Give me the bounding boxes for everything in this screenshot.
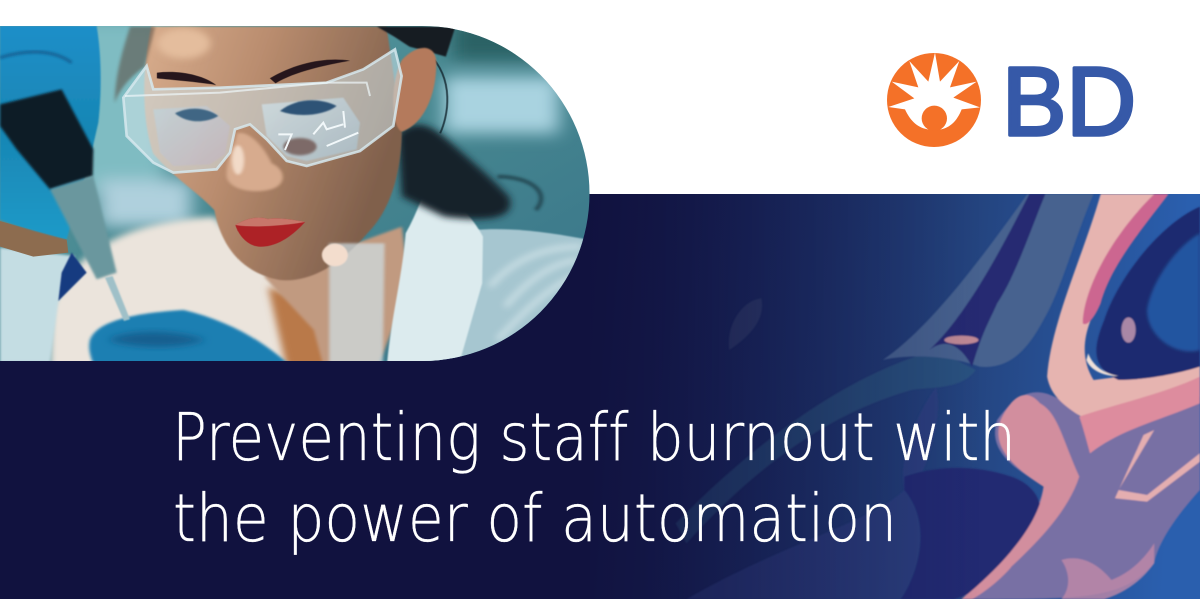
- right coat: [425, 228, 584, 361]
- forehead highlight: [157, 28, 210, 59]
- faint wisp: [729, 298, 762, 350]
- lab coat left: [50, 217, 299, 373]
- rose horizontal stroke: [1079, 377, 1200, 453]
- title line 1: Preventing staff burnout with: [172, 399, 1016, 476]
- upper lip: [235, 218, 305, 226]
- pipette tip: [105, 276, 130, 321]
- blurred lab backdrop: [73, 20, 566, 227]
- sleeve navy edge: [58, 253, 87, 301]
- goggle top bar highlight: [125, 83, 370, 96]
- pink salmon lobe: [961, 395, 1079, 599]
- left eyebrow: [157, 72, 216, 85]
- nose highlight: [232, 145, 244, 175]
- lens reflection smudge: [283, 138, 317, 155]
- light window patches: [444, 77, 559, 133]
- logo: BD: [887, 47, 1136, 156]
- artwork gradient base: [661, 194, 1200, 599]
- blue oval centre: [1147, 233, 1200, 351]
- light orb: [322, 244, 348, 266]
- lips: [235, 218, 305, 247]
- sleeve: [0, 248, 75, 363]
- coat fold highlights: [490, 247, 582, 340]
- test tube: [329, 243, 385, 370]
- inner shirt: [264, 284, 324, 361]
- pink dab: [944, 336, 979, 344]
- glove shadow: [107, 332, 207, 347]
- artwork left fade: [631, 194, 956, 599]
- dark swirl under word: [901, 468, 1041, 599]
- dark blue oval: [1096, 207, 1200, 380]
- lower pink ripple: [1061, 543, 1154, 599]
- left eye: [175, 109, 218, 121]
- glove knuckle shadow: [0, 52, 72, 63]
- logo symbol: [887, 53, 981, 147]
- hair strand loop: [498, 177, 541, 210]
- ear: [393, 48, 436, 132]
- goggle body: [123, 49, 402, 173]
- top hair: [377, 27, 455, 57]
- grey blue ribbon: [883, 194, 1094, 367]
- nose: [227, 133, 283, 191]
- goggle rim: [123, 49, 402, 173]
- goggles: [123, 49, 402, 173]
- right lens: [262, 98, 360, 161]
- wrist: [0, 221, 68, 257]
- white starburst: [888, 53, 980, 129]
- dark top right: [446, 28, 530, 66]
- hair mass: [398, 125, 510, 219]
- upper glove: [0, 26, 101, 239]
- pale left backdrop: [73, 20, 165, 193]
- cream vertical band: [1047, 194, 1200, 453]
- cream crescent: [1086, 353, 1119, 376]
- title: [172, 399, 1016, 557]
- abstract paint artwork: [590, 194, 1200, 599]
- artwork paint strokes: [676, 194, 1200, 599]
- photo: scientist with pipette: [0, 20, 600, 373]
- logo wordmark: BD: [1002, 47, 1136, 156]
- coat collar: [386, 200, 484, 361]
- mauve central mass: [961, 392, 1200, 599]
- neck: [264, 227, 409, 373]
- title line 2: the power of automation: [173, 480, 897, 557]
- pink inner stroke: [1083, 194, 1169, 324]
- photo background: [0, 26, 600, 362]
- face: [144, 27, 402, 280]
- lower indigo sweep: [686, 387, 938, 599]
- gloved hand and pipette: [0, 26, 130, 363]
- pipette body: [0, 89, 93, 189]
- left lens: [153, 106, 230, 166]
- orange disc: [887, 53, 981, 147]
- hair strand: [435, 60, 448, 134]
- light left patch: [100, 180, 191, 227]
- left temple hair: [115, 27, 155, 103]
- lower glove: [89, 310, 295, 370]
- figure head: [922, 106, 947, 131]
- right eye: [280, 100, 337, 115]
- teal sweep: [676, 350, 976, 543]
- small pink spot: [1121, 317, 1136, 343]
- zig-zag pink line: [1115, 430, 1200, 502]
- goggle reflection writing: [278, 111, 358, 150]
- pipette barrel: [50, 176, 117, 279]
- navy band background: [0, 194, 1200, 599]
- dark indigo ribbon core: [929, 194, 1045, 367]
- right eyebrow: [270, 60, 350, 83]
